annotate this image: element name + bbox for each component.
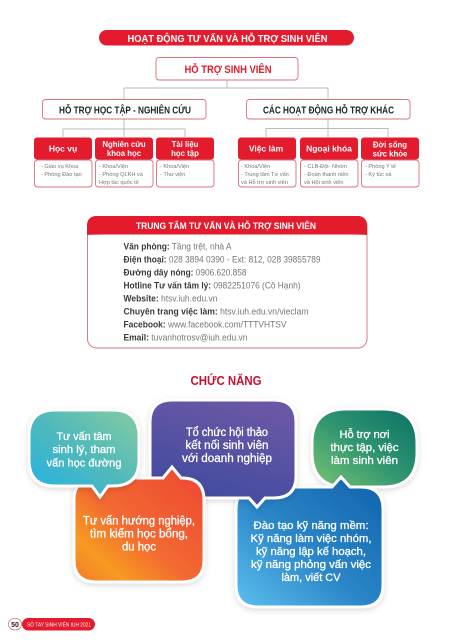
panel: trung tâm tư vấn: Đường dây nóng: 0906.620.858 [124,268,247,278]
card: đời sống sức khỏe [361,138,419,187]
card: học vụ [34,138,92,187]
box: các hoạt động hỗ trợ khác: CÁC HOẠT ĐỘNG HỖ TRỢ KHÁC [263,103,394,116]
panel: trung tâm tư vấn [87,216,367,348]
bubble: hỗ trợ nơi thực tập: Hỗ trợ nơi [340,428,390,441]
card: nghiên cứu khoa học: Nghiên cứu [102,140,146,149]
bubble: tổ chức hội thảo: với doanh nghiệp [182,453,272,465]
card: nghiên cứu khoa học: - Khoa/Viện [99,164,128,170]
card: đời sống sức khỏe: - Phòng Y tế [365,164,397,170]
card: việc làm: và Hỗ trợ sinh viên [241,179,288,186]
card: nghiên cứu khoa học [95,138,153,187]
bubble: tư vấn hướng nghiệp: du học [122,542,156,554]
bubble: tổ chức hội thảo: Tổ chức hội thảo [186,427,268,439]
card: đời sống sức khỏe: Đời sống [373,140,407,150]
bubble: đào tạo kỹ năng mềm [236,477,383,607]
box: hỗ trợ học tập - nghiên cứu: HỖ TRỢ HỌC TẬP - NGHIÊN CỨU [59,103,191,116]
panel: trung tâm tư vấn: Facebook: www.facebook.com/TTTVHTSV [124,320,287,330]
card: tài liệu học tập [156,138,214,187]
card: học vụ: Học vụ [49,144,77,154]
bubble: tư vấn tâm sinh lý: vấn học đường [46,458,122,470]
panel: trung tâm tư vấn: Email: tuvanhotrosv@iuh.edu.vn [124,332,248,342]
footer: page number: 50 [11,622,19,629]
card: ngoại khóa: Ngoại khóa [306,144,352,154]
card: ngoại khóa: - Đoàn thanh niên [304,172,348,178]
main box: hỗ trợ sinh viên [156,58,298,80]
panel: trung tâm tư vấn: Website: htsv.iuh.edu.vn [124,294,218,304]
bubble: tư vấn hướng nghiệp [74,467,204,582]
card: tài liệu học tập: - Thư viện [160,172,185,178]
main box: hỗ trợ sinh viên: HỖ TRỢ SINH VIÊN [184,63,272,76]
card: học vụ: - Phòng Đào tạo [41,172,82,178]
bubble: hỗ trợ nơi thực tập: làm sinh viên [331,455,398,467]
card: nghiên cứu khoa học: - Phòng QLKH và [99,172,144,178]
card: học vụ: - Giáo vụ Khoa [41,164,79,170]
title banner: HOẠT ĐỘNG TƯ VẤN VÀ HỖ TRỢ SINH VIÊN [128,32,328,45]
title banner [99,30,354,46]
card: đời sống sức khỏe: sức khỏe [373,150,408,158]
bubble: hỗ trợ nơi thực tập: thực tập, việc [330,442,399,454]
footer: page number [8,618,95,630]
card: việc làm: Việc làm [249,144,284,154]
bubble: tư vấn tâm sinh lý: sinh lý, tham [52,444,116,456]
panel: trung tâm tư vấn: Văn phòng: Tầng trệt, nhà A [124,242,232,252]
org chart connectors [63,80,388,137]
panel: trung tâm tư vấn: TRUNG TÂM TƯ VẤN VÀ HỖ TRỢ SINH VIÊN [136,220,316,231]
card: ngoại khóa: và Hội sinh viên [304,180,344,186]
panel: trung tâm tư vấn: Hotline Tư vấn tâm lý: 0982251076 (Cô Hạnh) [124,280,301,290]
card: việc làm: - Trung tâm Tư vấn [241,172,289,178]
card: tài liệu học tập: Tài liệu [172,140,199,149]
bubble: đào tạo kỹ năng mềm: Đào tạo kỹ năng mềm: [254,520,368,532]
card: ngoại khóa [300,138,358,187]
bubble: tư vấn tâm sinh lý [29,410,139,497]
panel: trung tâm tư vấn: Điện thoại: 028 3894 0390 - Ext: 812, 028 39855789 [124,254,321,264]
card: việc làm: - Khoa/Viện [241,164,270,170]
bubble: tư vấn hướng nghiệp: tìm kiếm học bổng, [90,528,188,540]
card: tài liệu học tập: - Khoa/Viện [160,164,189,170]
bubble: tư vấn hướng nghiệp: Tư vấn hướng nghiệp, [83,516,195,528]
bubble: hỗ trợ nơi thực tập [312,409,417,487]
footer: page number: SỔ TAY SINH VIÊN IUH 2021 [27,620,91,628]
card: nghiên cứu khoa học: Hợp tác quốc tế [99,180,140,186]
panel: trung tâm tư vấn: Chuyên trang việc làm: htsv.iuh.edu.vn/vieclam [124,306,308,316]
card: nghiên cứu khoa học: khoa học [107,149,142,158]
bubble: tổ chức hội thảo [150,400,296,507]
card: tài liệu học tập: học tập [171,149,199,158]
heading: chức năng: CHỨC NĂNG [190,373,262,388]
bubble: tổ chức hội thảo: kết nối sinh viên [186,440,268,452]
bubble: đào tạo kỹ năng mềm: kỹ năng lập kế hoạch, [256,546,366,558]
card: đời sống sức khỏe: - Ký túc xá [365,172,392,178]
box: các hoạt động hỗ trợ khác [246,100,410,119]
bubble: đào tạo kỹ năng mềm: kỹ năng phỏng vấn việc [251,559,372,571]
card: việc làm [238,138,296,187]
box: hỗ trợ học tập - nghiên cứu [42,100,206,119]
bubble: đào tạo kỹ năng mềm: Kỹ năng làm việc nhóm, [250,533,372,545]
card: ngoại khóa: - CLB-Đội- Nhóm [304,164,347,170]
bubble: đào tạo kỹ năng mềm: làm, viết CV [282,572,341,584]
bubble: tư vấn tâm sinh lý: Tư vấn tâm [56,431,112,443]
